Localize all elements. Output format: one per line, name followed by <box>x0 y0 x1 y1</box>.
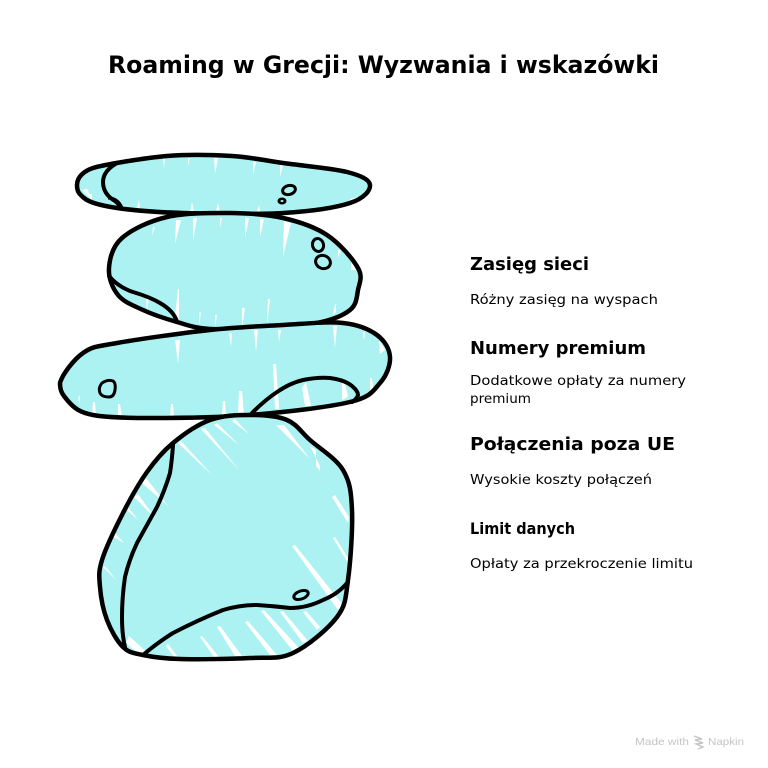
item: Limit danych: Opłaty za przekroczenie limitu <box>470 556 693 572</box>
stone 4: bottom <box>99 415 352 659</box>
footer: Made with Napkin: Made with <box>635 736 689 748</box>
stone 1: top <box>77 155 370 214</box>
stone 3 <box>60 322 390 418</box>
item: Numery premium: Dodatkowe opłaty za numery <box>470 373 686 389</box>
item: Zasięg sieci: Zasięg sieci <box>470 254 589 275</box>
item: Zasięg sieci: Różny zasięg na wyspach <box>470 292 658 308</box>
item: Połączenia poza UE <box>470 434 675 488</box>
item: Numery premium <box>470 338 686 407</box>
item: Numery premium: premium <box>470 391 531 407</box>
title: Roaming w Grecji: Wyzwania i wskazówki <box>108 51 659 79</box>
item: Limit danych <box>470 519 693 572</box>
stone 2 <box>109 213 361 329</box>
footer: Made with Napkin <box>635 736 744 749</box>
item: Połączenia poza UE: Połączenia poza UE <box>470 434 675 455</box>
item: Zasięg sieci <box>470 254 658 308</box>
item: Limit danych: Limit danych <box>470 519 575 538</box>
footer: Made with Napkin: Napkin <box>708 736 744 748</box>
item: Połączenia poza UE: Wysokie koszty połączeń <box>470 472 652 488</box>
stacked stones illustration <box>60 155 390 659</box>
item: Numery premium: Numery premium <box>470 338 646 359</box>
